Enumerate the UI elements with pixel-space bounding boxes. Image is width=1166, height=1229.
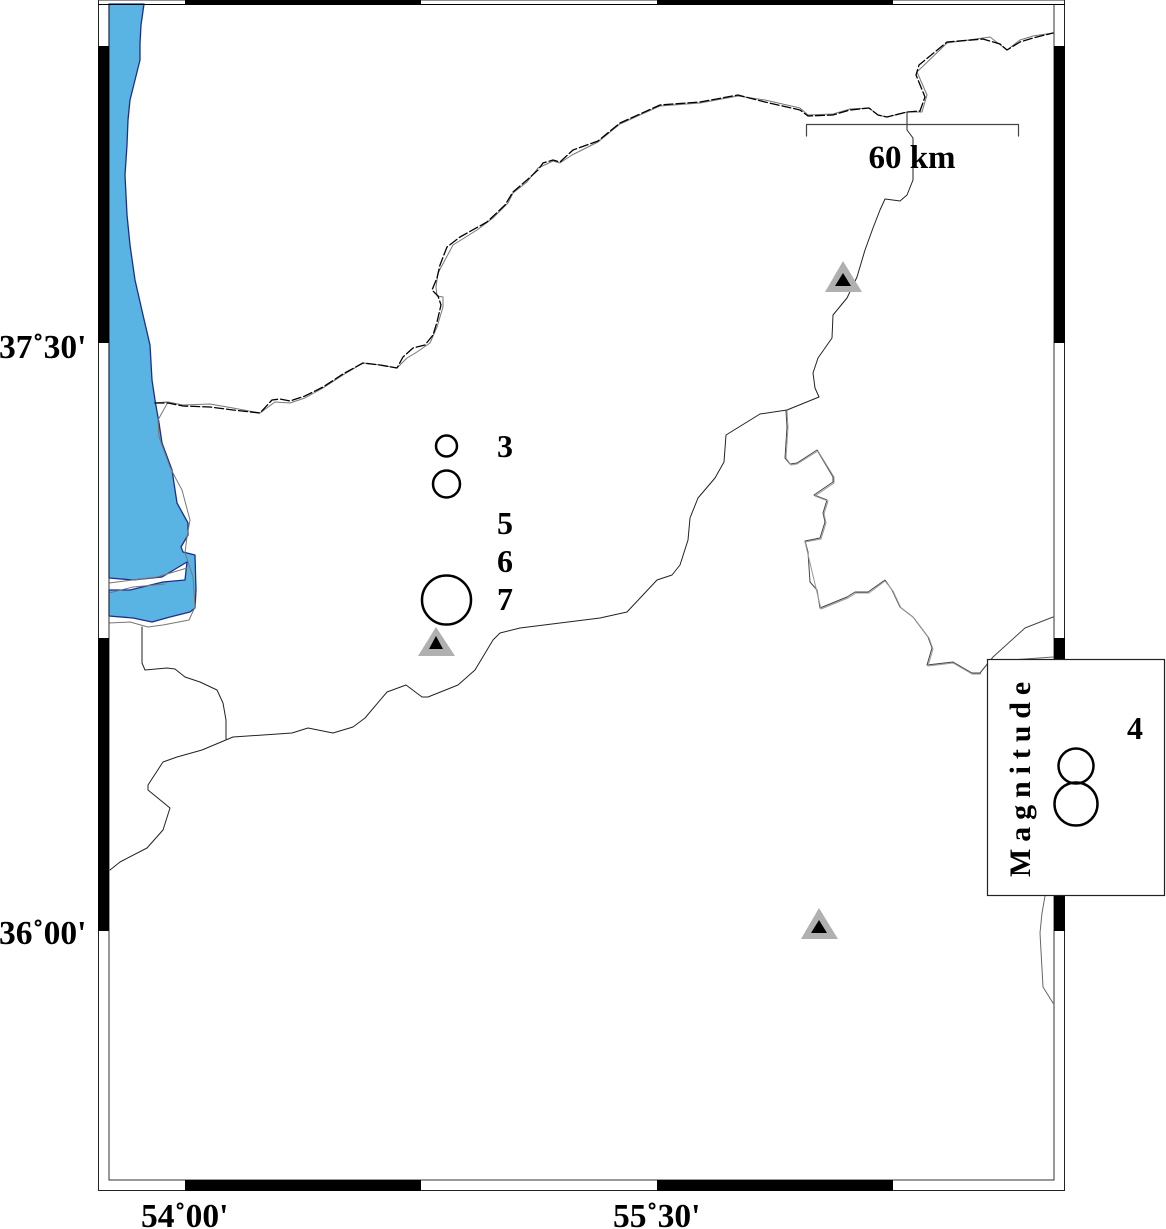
border: central boundary (110, 112, 913, 870)
latitude label 36°00': 36˚00' (0, 915, 86, 952)
latitude label 37°30': 37˚30' (0, 329, 86, 366)
legend title: Magnitude (1004, 675, 1037, 877)
legend circles (1054, 748, 1098, 826)
magnitude numbers: 7 (497, 581, 513, 617)
legend number: 4 (1127, 710, 1143, 746)
magnitude numbers: 3 (497, 428, 513, 464)
border: south east fragment (1010, 657, 1053, 1003)
magnitude circles (422, 436, 471, 624)
seismic station triangle west (418, 627, 455, 656)
magnitude numbers: 5 (497, 505, 513, 541)
magnitude legend box (988, 660, 1164, 896)
scale bar: 60 km (806, 124, 1018, 176)
border: inner province boundary loop (785, 411, 1053, 674)
water: Caspian Sea (109, 4, 196, 622)
seismic station triangle south (801, 908, 838, 939)
seismic station triangle north east (825, 261, 862, 292)
border: lateral branch south of coast (142, 627, 226, 739)
magnitude numbers: 6 (497, 543, 513, 579)
scale bar: 60 km: 60 km (868, 140, 956, 176)
magnitude numbers (497, 428, 513, 617)
border: northern province boundary (155, 33, 1053, 413)
coastline grey trace (109, 402, 195, 627)
